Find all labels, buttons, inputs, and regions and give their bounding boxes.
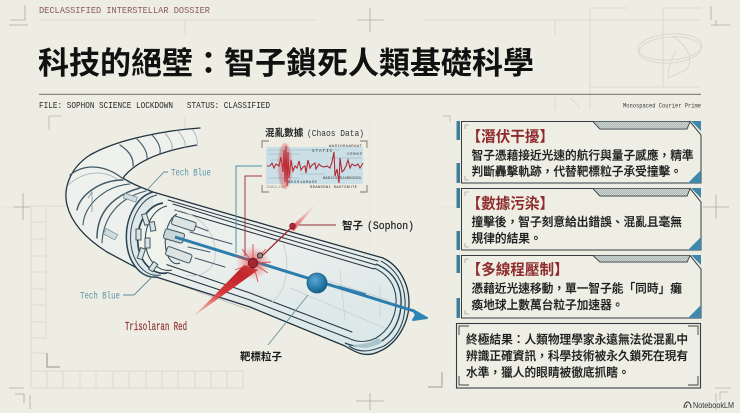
panel: 潛伏干擾: 判斷轟擊軌跡，代替靶標粒子承受撞擊。 (472, 164, 682, 178)
label: tech blue lower (80, 274, 155, 302)
font note: Monospaced Courier Prime (623, 102, 701, 110)
panel: 潛伏干擾 (456, 121, 701, 183)
scattered data labels: WARIORAARAAT (329, 145, 363, 149)
tube outlines (66, 128, 409, 354)
panel: 多線程壓制: 瘓地球上數萬台粒子加速器。 (472, 298, 623, 312)
scattered data labels: NEX01ARADE (288, 181, 318, 185)
label: tech blue upper (147, 168, 211, 190)
sophon trail and particle (257, 202, 318, 258)
panel: 多線程壓制: 憑藉近光速移動，單一智子能「同時」癱 (472, 282, 682, 296)
panel: final result: 水準，獵人的眼睛被徹底抓瞎。 (466, 366, 630, 380)
header tag: DECLASSIFIED INTERSTELLAR DOSSIER (39, 5, 210, 16)
label: sophon: 智子 (342, 219, 363, 232)
waveform (267, 146, 363, 186)
panel: final result: 終極結果：人類物理學家永遠無法從混亂中 (466, 332, 688, 346)
label: target particle: 靶標粒子 (240, 350, 282, 363)
collision point (248, 258, 258, 268)
label: tech blue upper: Tech Blue (171, 168, 211, 178)
target particle sphere (307, 273, 327, 293)
chaos data leader: red (245, 176, 262, 256)
chaos data panel (262, 141, 367, 192)
label: trisolaran red: Trisolaran Red (125, 321, 187, 334)
scattered data labels: INACLIDE (266, 186, 287, 190)
chaos data leader: blue (236, 166, 262, 253)
panel: 數據污染: 撞擊後，智子刻意給出錯誤、混亂且毫無 (472, 215, 682, 229)
internal rods (188, 226, 388, 328)
panel: 數據污染 (456, 188, 701, 250)
label: chaos data: (Chaos Data) (307, 128, 364, 139)
accelerator opening rings (126, 192, 215, 277)
panel: 多線程壓制 (456, 255, 701, 318)
panel: 潛伏干擾: 【潛伏干擾】 (466, 128, 554, 146)
tube body (66, 128, 409, 354)
label: chaos data (265, 127, 364, 139)
diagram: particle accelerator tube (66, 128, 409, 354)
scattered data labels: CRMKP (347, 153, 363, 157)
panel: 數據污染: 規律的結果。 (472, 232, 542, 246)
panel: final result (456, 324, 700, 388)
tiny motion arrow (338, 286, 366, 294)
file status line: FILE: SOPHON SCIENCE LOCKDOWN STATUS: CLASSIFIED (39, 101, 270, 111)
end cap rim (345, 261, 405, 351)
NotebookLM badge: NotebookLM (693, 400, 734, 410)
scattered data labels: BARJIS RJARDOCKS (323, 177, 362, 181)
label: tech blue lower: Tech Blue (80, 290, 120, 302)
label: sophon: (Sophon) (367, 221, 414, 233)
bend panel details (88, 192, 137, 240)
panel: 潛伏干擾: 智子憑藉接近光速的航行與量子感應，精準 (472, 148, 694, 162)
label: chaos data: 混亂數據 (265, 127, 304, 139)
blueprint sketch: top right (570, 32, 703, 108)
panel: final result: 辨識正確資訊，科學技術被永久鎖死在現有 (466, 349, 688, 363)
panel: 多線程壓制: 【多線程壓制】 (466, 260, 569, 278)
blue beam arrow (175, 237, 427, 320)
red impact wedge (194, 244, 271, 316)
scattered data labels: BRANDONI RAKTS6UTE (310, 186, 358, 190)
title rule (39, 94, 701, 95)
label: target particle (240, 295, 308, 363)
panel: 數據污染: 【數據污染】 (466, 194, 554, 212)
scattered data labels: STATIC (312, 150, 332, 154)
label: sophon (299, 219, 414, 233)
ribbed bend rings (68, 130, 197, 243)
scattered data labels (266, 145, 363, 190)
title: 科技的絕壁：智子鎖死人類基礎科學 (38, 46, 534, 81)
